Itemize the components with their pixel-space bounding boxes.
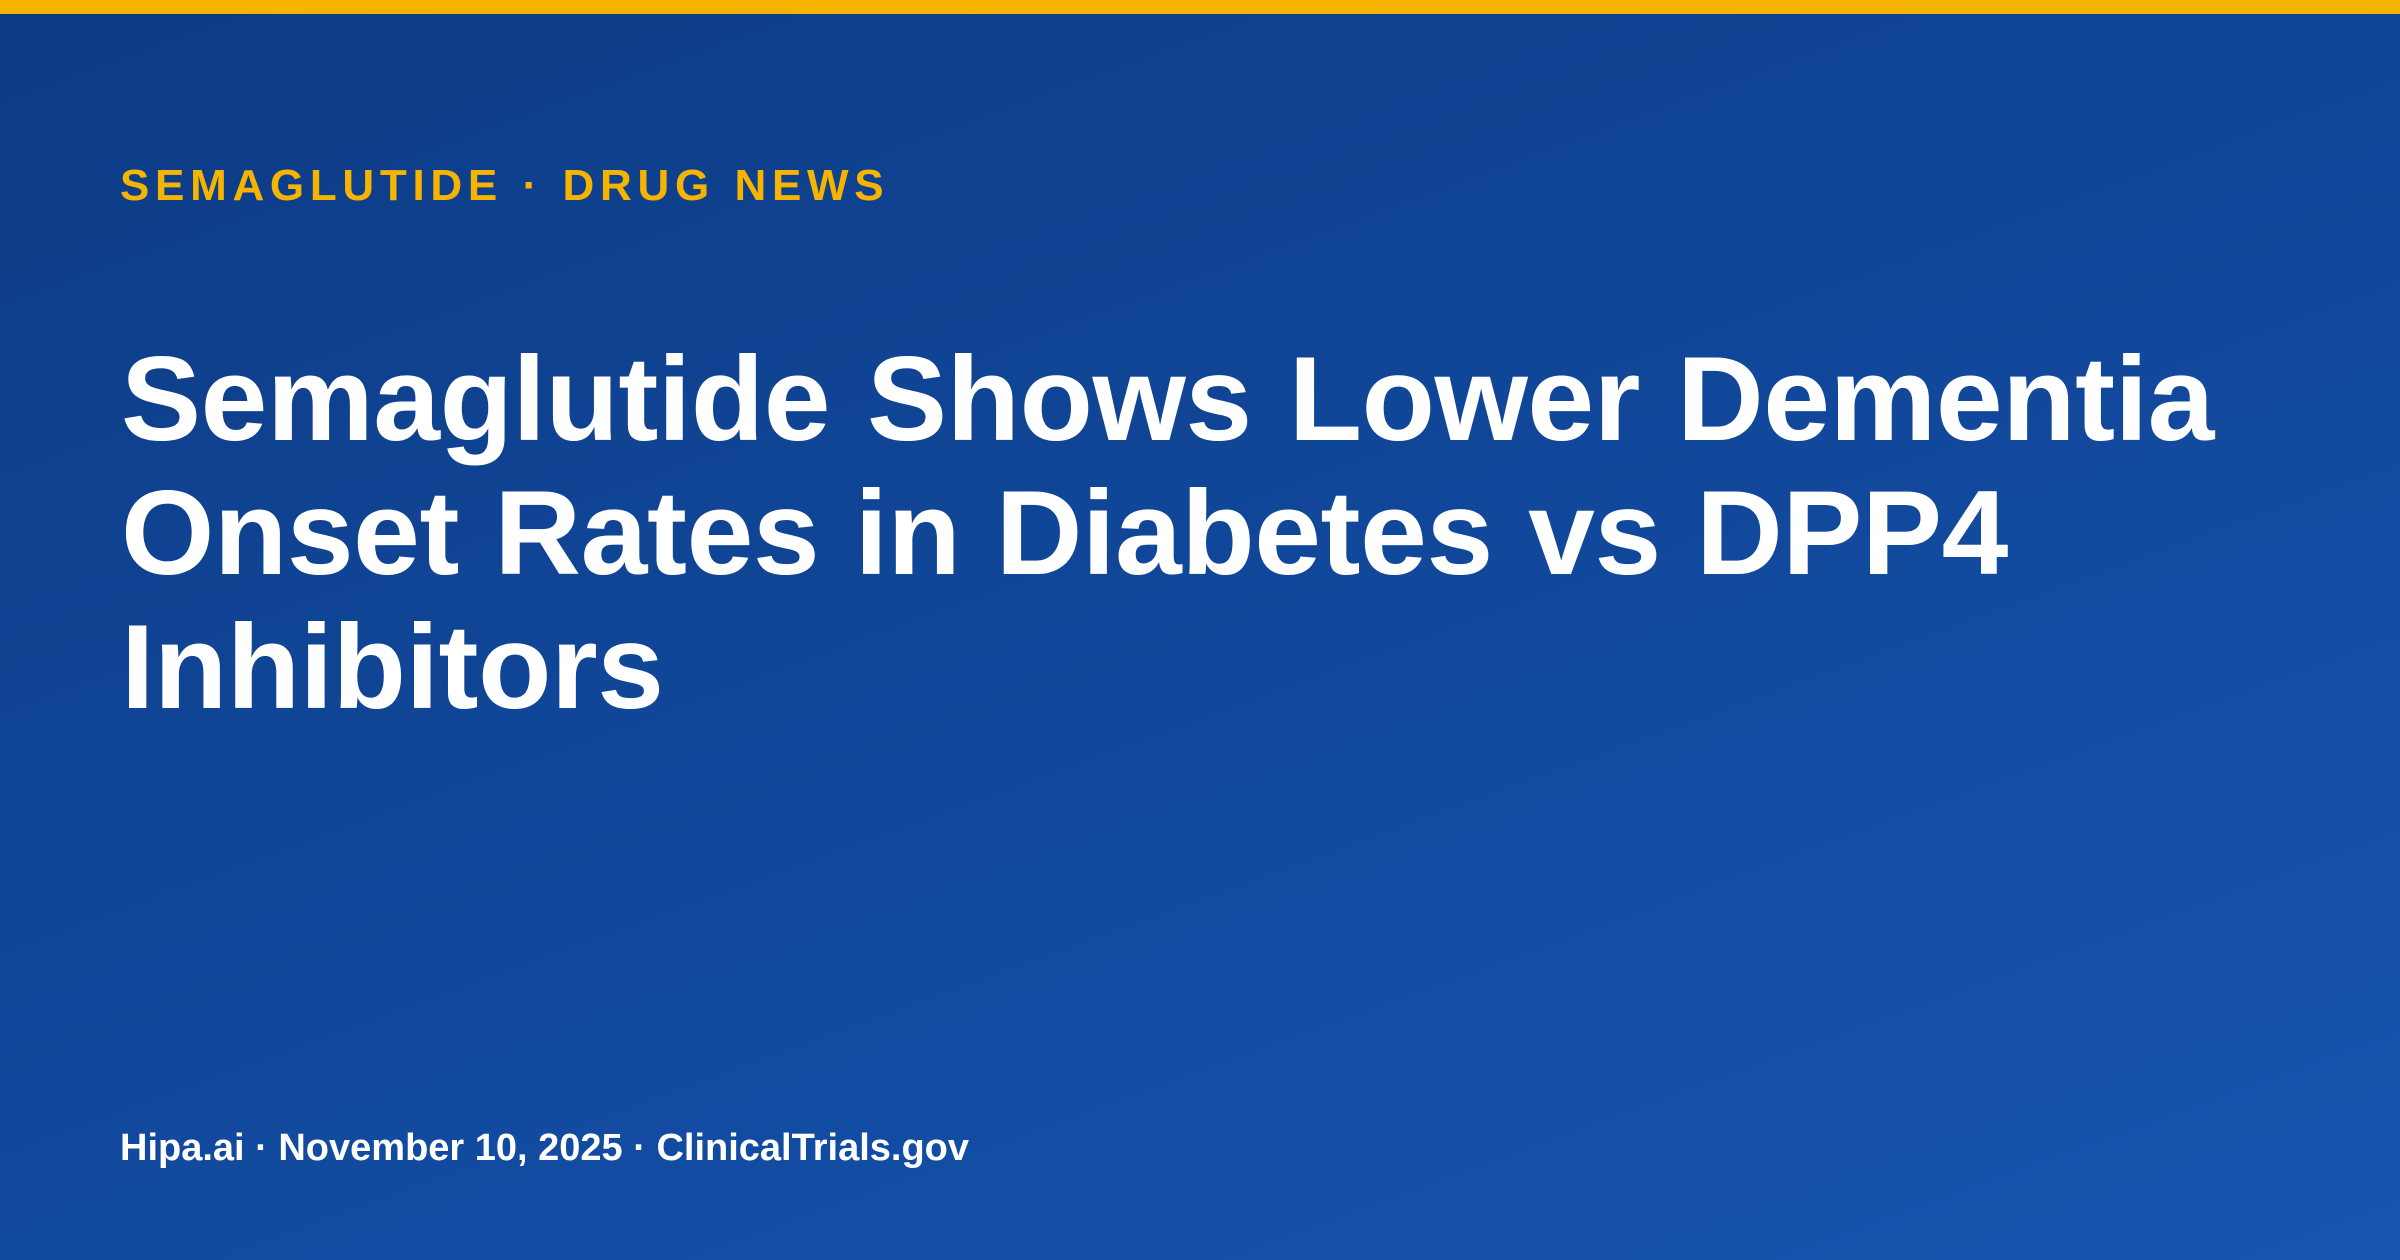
eyebrow label: SEMAGLUTIDE · DRUG NEWS [120,159,889,209]
title: Semaglutide Shows Lower Dementia [121,332,2214,466]
title [121,332,2216,735]
title: Onset Rates in Diabetes vs DPP4 [121,466,2008,600]
title: Inhibitors [121,601,664,735]
accent bar [0,0,2400,14]
footer source line: Hipa.ai · November 10, 2025 · ClinicalTrials.gov [120,1128,969,1170]
